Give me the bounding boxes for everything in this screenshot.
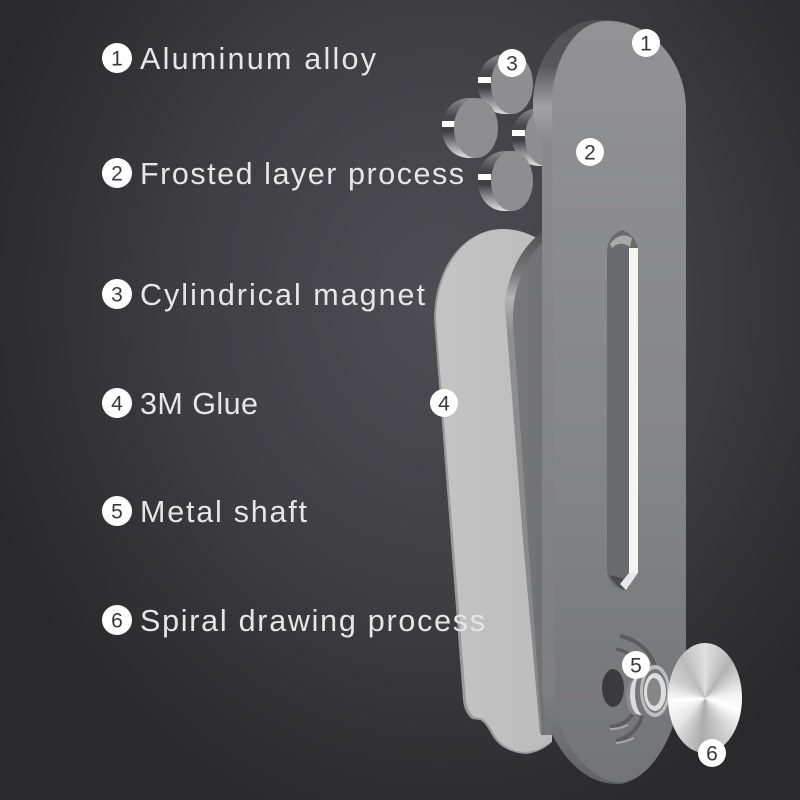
part: aluminum plate <box>533 20 686 784</box>
callout badge 1 <box>632 29 660 57</box>
part: magnets <box>442 54 567 211</box>
label: 6 Spiral drawing process: 6 <box>111 610 123 632</box>
label: 5 Metal shaft: 5 <box>111 500 123 524</box>
callout badge 5: 5 <box>630 654 642 678</box>
callout badge 5 <box>622 651 650 679</box>
callout badge 6 <box>698 739 726 767</box>
callout badge 1: 1 <box>640 32 652 56</box>
panel: exploded product diagram <box>434 20 742 784</box>
callout badge 4: 4 <box>438 392 450 416</box>
part: 3M glue pad <box>434 229 552 754</box>
label: 3 Cylindrical magnet: 3 <box>111 284 123 306</box>
magnet left <box>442 98 498 158</box>
label: 3 Cylindrical magnet: Cylindrical magnet <box>140 278 426 312</box>
callout badge 6: 6 <box>706 742 718 766</box>
callout badge 2 <box>576 138 604 166</box>
callout badge 3: 3 <box>506 52 518 76</box>
label: 2 Frosted layer process: 2 <box>111 162 123 186</box>
part: metal shaft <box>626 665 670 717</box>
hole <box>602 669 624 707</box>
callout badge 2: 2 <box>584 142 596 164</box>
callout badge 4 <box>430 389 458 417</box>
label: 4 3M Glue: 3M Glue <box>140 387 258 421</box>
magnet bottom <box>478 151 533 211</box>
label: 2 Frosted layer process: Frosted layer process <box>140 157 464 191</box>
part: middle bracket strip <box>505 232 558 735</box>
label: 6 Spiral drawing process: Spiral drawing process <box>140 604 485 638</box>
countersink rings <box>610 636 656 743</box>
part: spiral drawn disc <box>668 643 742 753</box>
label: 4 3M Glue: 4 <box>111 392 123 416</box>
slot <box>607 230 638 590</box>
callout badge 3 <box>498 49 526 77</box>
label: 5 Metal shaft: Metal shaft <box>140 495 308 529</box>
label: 1 Aluminum alloy: 1 <box>111 48 123 70</box>
label: 1 Aluminum alloy: Aluminum alloy <box>140 42 377 76</box>
magnet right <box>512 108 567 166</box>
magnet top <box>478 54 533 114</box>
